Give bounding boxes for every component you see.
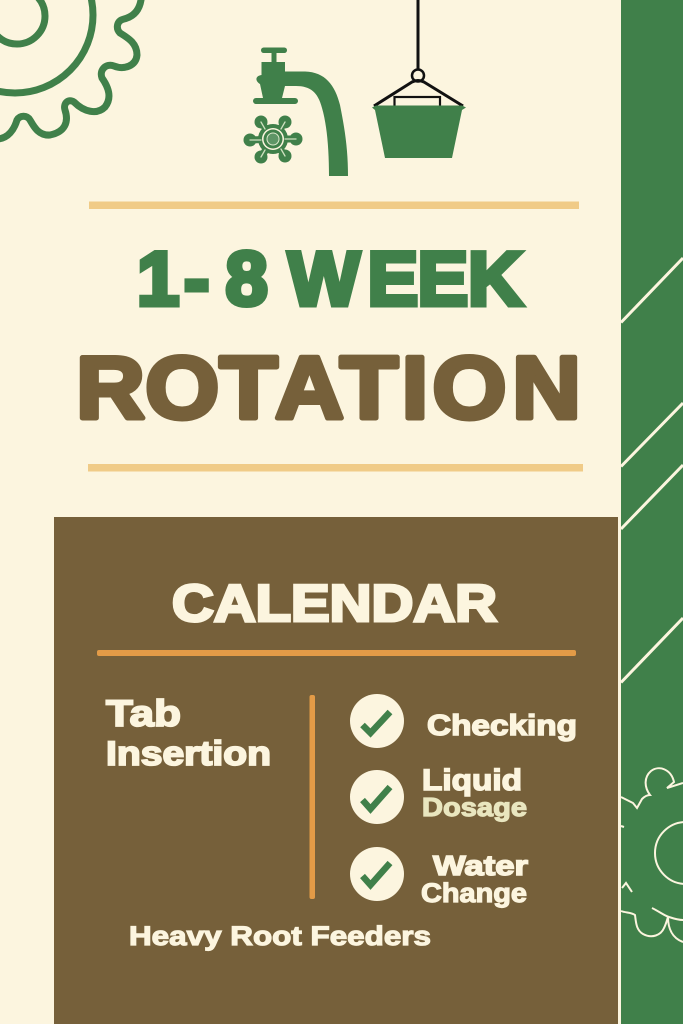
icon: valve wheel (244, 116, 302, 164)
icon: check two (350, 770, 404, 824)
gear outline: bottom right (621, 768, 683, 942)
icon: water faucet (253, 48, 348, 176)
text: tab insertion: Tab (106, 693, 181, 734)
text: water: Water (433, 850, 528, 881)
text: liquid: Liquid (422, 764, 522, 797)
divider: lower rule (88, 464, 583, 472)
gear outline: top left (0, 0, 141, 139)
divider: orange horizontal (97, 650, 576, 656)
icon: check one (350, 694, 404, 748)
text: heavy root feeders: Heavy Root Feeders (129, 921, 431, 951)
text: tab insertion: Insertion (106, 735, 271, 773)
icon: check three (350, 847, 404, 901)
text: tab insertion (106, 693, 271, 773)
icon: hanging bucket (372, 0, 466, 158)
text: dosage: Dosage (422, 792, 527, 822)
heading: calendar: CALENDAR (172, 575, 497, 633)
panel: green side stripe (621, 0, 683, 1024)
title: 1-8 WEEK: 1-8 WEEK (137, 237, 523, 322)
divider: orange vertical (310, 695, 315, 899)
divider: top rule (89, 202, 579, 209)
text: checking: Checking (427, 710, 577, 742)
text: change: Change (421, 878, 527, 908)
title: ROTATION: ROTATION (76, 339, 581, 437)
panel: calendar (54, 517, 621, 1024)
